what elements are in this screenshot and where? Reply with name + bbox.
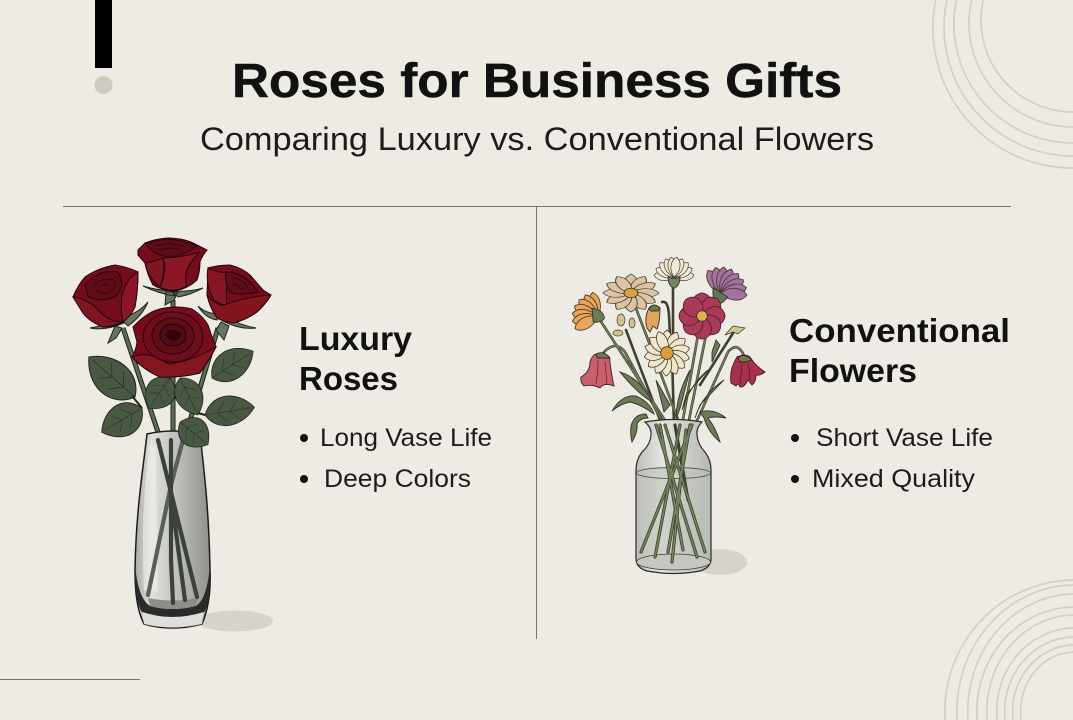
decorative rings: bottom right — [945, 580, 1073, 720]
heading: Luxury Roses: Luxury — [299, 320, 413, 357]
sepals — [90, 286, 256, 343]
flower: white fan — [654, 257, 694, 288]
stems in vase — [148, 440, 197, 603]
vase shadow — [197, 610, 273, 632]
glass vase — [135, 431, 210, 628]
flower: purple fan — [703, 266, 748, 305]
stems in vase — [641, 425, 705, 562]
title: Roses for Business Gifts — [232, 55, 842, 108]
vase base — [135, 565, 210, 617]
illustration: luxury roses in vase — [73, 238, 273, 632]
flower: crimson bell — [731, 355, 765, 387]
foliage — [612, 340, 726, 442]
heading: Conventional Flowers: Flowers — [789, 352, 917, 389]
flower: crimson — [679, 293, 725, 339]
horizontal divider — [63, 206, 1011, 207]
leaves — [77, 339, 261, 446]
rose: center — [132, 307, 216, 377]
flower: orange bud — [646, 305, 660, 332]
rose: left — [73, 265, 138, 327]
stems — [600, 285, 745, 425]
flower: pink bell — [581, 353, 614, 388]
heading: Luxury Roses — [299, 320, 413, 397]
footer rule — [0, 679, 140, 680]
glass vase — [636, 420, 711, 574]
flower: tan daisy — [603, 274, 659, 312]
decorative rings: top right — [933, 0, 1073, 168]
vase shadow — [693, 549, 747, 575]
heading: Luxury Roses: Roses — [299, 360, 398, 397]
rose: right — [207, 265, 271, 323]
exclamation accent — [94, 0, 112, 94]
sprigs — [613, 314, 745, 336]
list: conventional attributes — [791, 424, 993, 493]
list: luxury attributes: Deep Colors — [324, 465, 471, 493]
heading: Conventional Flowers — [789, 312, 1010, 389]
list: luxury attributes — [300, 424, 492, 493]
subtitle: Comparing Luxury vs. Conventional Flowers — [200, 121, 874, 157]
flower: cream daisy — [643, 330, 691, 376]
flower: orange side — [571, 291, 604, 334]
rose: top — [138, 238, 207, 291]
list: conventional attributes: Short Vase Life — [816, 424, 993, 452]
list: conventional attributes: Mixed Quality — [812, 465, 976, 493]
upper stems — [123, 300, 218, 440]
list: luxury attributes: Long Vase Life — [320, 424, 492, 452]
heading: Conventional Flowers: Conventional — [789, 312, 1010, 349]
illustration: conventional flowers in vase — [571, 257, 765, 575]
water — [637, 468, 710, 563]
vertical divider — [536, 206, 537, 639]
